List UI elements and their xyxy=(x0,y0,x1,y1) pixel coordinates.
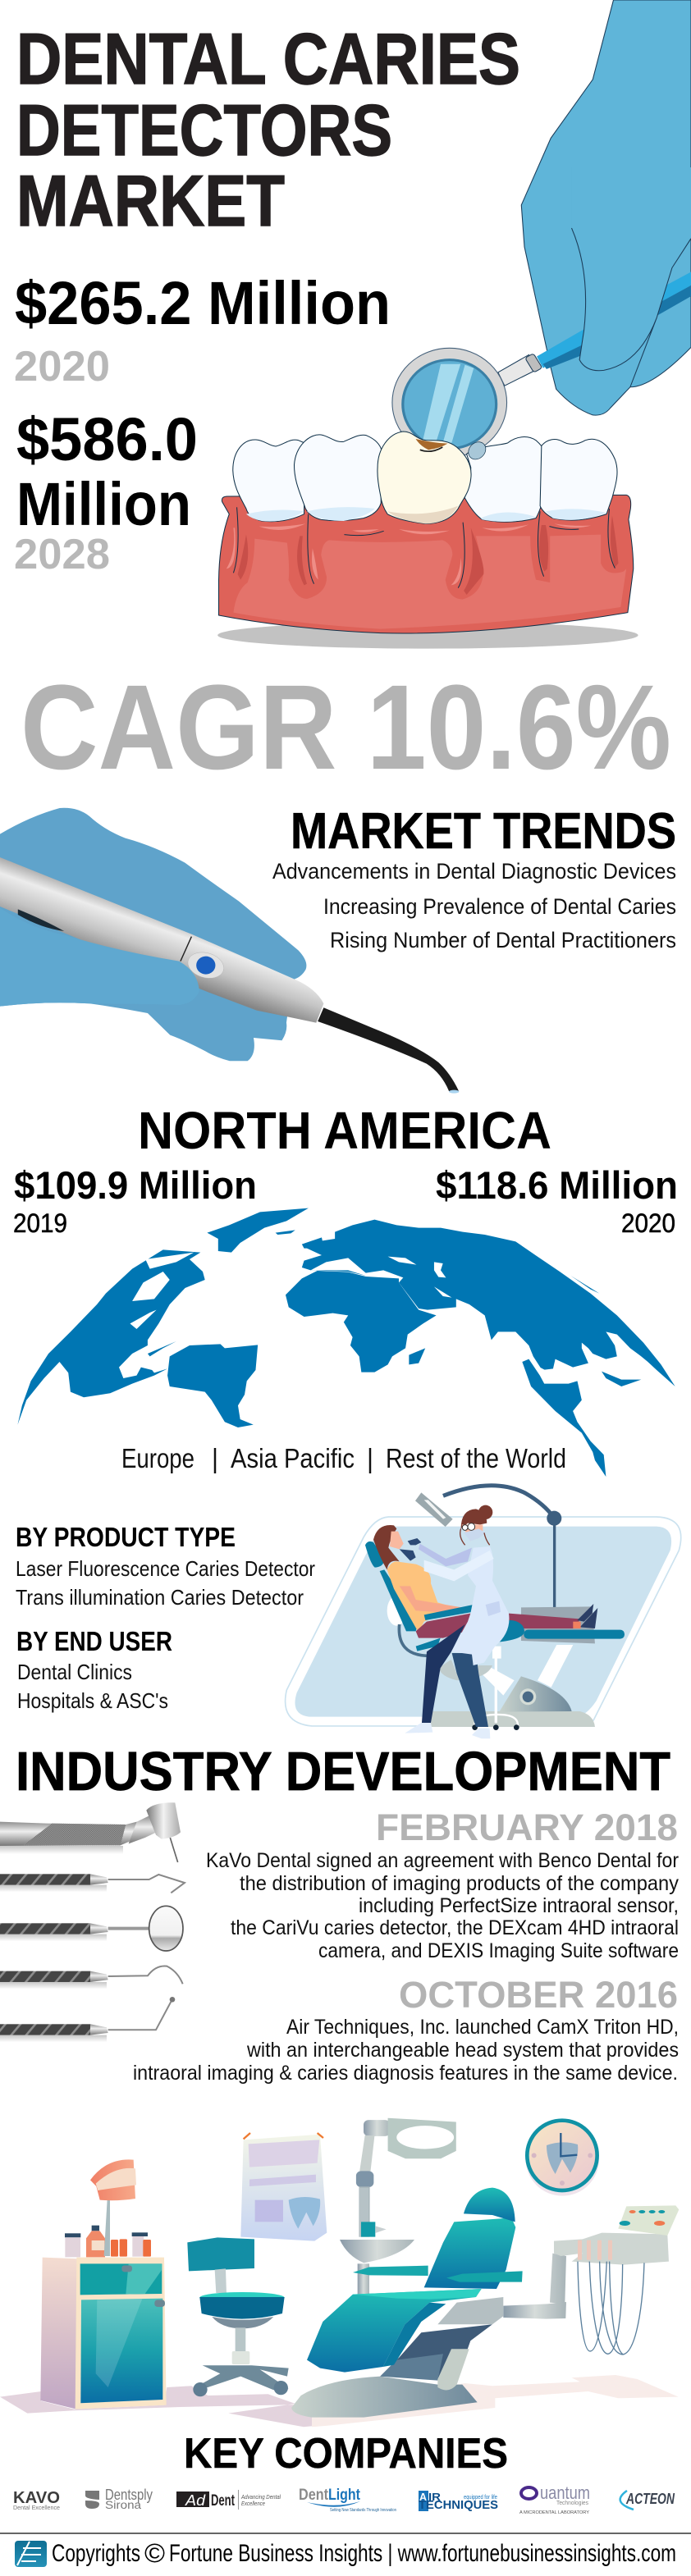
icon: gloved hand xyxy=(0,808,306,1061)
panel: February 2018 development xyxy=(206,1806,679,1962)
icon: patient xyxy=(365,1525,597,1656)
icon: delivery unit xyxy=(554,2205,679,2354)
text: other regions: Asia Pacific xyxy=(231,1443,355,1473)
stat: North America 2020: 2020 xyxy=(621,1208,675,1238)
logo: Air Techniques: TECHNIQUES xyxy=(419,2498,498,2512)
stat: 2020 market value: 2020 xyxy=(14,343,110,391)
stat: North America 2019: $109.9 Million xyxy=(14,1163,257,1207)
illustration: dental tools xyxy=(0,1802,185,2042)
icon: dental chair and delivery unit xyxy=(291,2188,679,2418)
heading: North America: NORTH AMERICA xyxy=(138,1101,551,1160)
text: copyright line: © xyxy=(144,2538,165,2568)
icon: gums xyxy=(219,495,634,633)
icon: explorer probe xyxy=(0,1874,185,1893)
icon: dentist xyxy=(400,1505,524,1738)
icon: gum highlights xyxy=(227,523,591,585)
logo: AdDent: Advancing Dental xyxy=(240,2493,281,2501)
logo: Quantum: Technologies xyxy=(556,2501,588,2506)
logo: KaVo: KAVO xyxy=(13,2489,60,2507)
icon: North America xyxy=(9,1249,205,1450)
icon: thumb xyxy=(0,908,199,1007)
icon: surgical light xyxy=(356,2118,456,2237)
logo: DentLight: Dent xyxy=(299,2487,329,2504)
heading: BY END USER xyxy=(16,1626,172,1656)
icon: background parallelogram xyxy=(286,1517,681,1726)
icon: chair backrest xyxy=(424,2217,515,2289)
text: other regions: | xyxy=(212,1443,218,1473)
logo: DentLight: Setting New Standards Through Innovation xyxy=(330,2508,396,2513)
title: MARKET xyxy=(16,160,285,241)
text block: end users: Dental Clinics xyxy=(17,1660,132,1684)
icon: white teeth xyxy=(233,435,617,522)
logo: Quantum xyxy=(519,2482,590,2515)
text block: end users xyxy=(17,1660,168,1713)
logo: Air Techniques xyxy=(419,2491,498,2512)
logo: AdDent xyxy=(176,2490,281,2510)
text: other regions xyxy=(121,1443,566,1473)
text block: product types: Laser Fluorescence Caries Detector xyxy=(16,1556,315,1581)
icon: Iceland xyxy=(276,1230,295,1235)
stat: 2020 market value: $265.2 Million xyxy=(15,269,391,337)
text: other regions: Europe xyxy=(121,1443,194,1473)
icon: glove xyxy=(521,0,691,415)
icon: stool xyxy=(187,2237,289,2396)
icon: cabinet xyxy=(40,2258,167,2409)
logo: Dentsply Sirona: Dentsply xyxy=(105,2487,153,2503)
logo: Dentsply Sirona: Sirona xyxy=(105,2498,141,2511)
logos: key companies xyxy=(13,2482,675,2515)
stat: 2028 market value xyxy=(14,405,198,578)
stat: 2020 market value xyxy=(14,269,391,391)
text block: product types xyxy=(16,1556,315,1610)
icon: gum light area xyxy=(233,535,626,629)
icon: Maritime Asia and Australia strip xyxy=(522,1359,606,1477)
icon: handpiece xyxy=(0,1802,181,1862)
logo: AdDent: Dent xyxy=(211,2492,235,2510)
icon: shadow under pen xyxy=(18,909,64,931)
panel: market trends xyxy=(272,803,676,952)
logo: Dentsply Sirona xyxy=(85,2487,153,2511)
icon: tooth root shading and cavity xyxy=(387,439,489,523)
stat: North America 2019 xyxy=(13,1163,257,1238)
logo: Fortune Business Insights xyxy=(15,2541,47,2567)
logo: AdDent: Ad xyxy=(185,2492,206,2509)
logo: AdDent: Excellence xyxy=(241,2500,265,2507)
icon: decayed tooth xyxy=(378,432,471,523)
icon: wall clock with tooth xyxy=(526,2121,599,2196)
icon: tooth bases xyxy=(246,507,606,522)
logo: Air Techniques: A xyxy=(419,2491,428,2503)
world map xyxy=(9,1208,675,1477)
icon: mouth mirror xyxy=(0,1906,183,1951)
stat: North America 2020: $118.6 Million xyxy=(436,1163,678,1207)
icon: dental chair base xyxy=(431,1606,625,1727)
icon: chair seat xyxy=(307,2289,482,2373)
illustration: gums and teeth xyxy=(217,432,638,649)
text block: trends xyxy=(272,859,676,952)
heading: OCTOBER 2016 xyxy=(399,1974,678,2016)
panel: October 2016 development xyxy=(133,1974,679,2085)
icon: mirror handle xyxy=(498,272,691,386)
icon: overhead lamp xyxy=(415,1486,561,1608)
icon: bottles and denture model xyxy=(65,2159,151,2257)
stat: 2028 market value: $586.0 xyxy=(16,405,198,473)
icon: UK xyxy=(302,1237,324,1249)
illustration: gloved hand holding caries detector pen xyxy=(0,808,459,1094)
panel: by product type xyxy=(16,1522,315,1610)
stat: 2028 market value: Million xyxy=(16,470,191,538)
stat: North America 2020 xyxy=(436,1163,678,1238)
icon: gum lines xyxy=(233,507,615,588)
illustration: dentist treating patient xyxy=(286,1486,681,1738)
footer: copyright xyxy=(15,2538,676,2568)
text block xyxy=(206,1849,679,1962)
icon: floor shadows xyxy=(0,2375,679,2427)
stat: North America 2019: 2019 xyxy=(13,1208,67,1238)
icon: Greenland xyxy=(207,1208,309,1253)
logo: Quantum: uantum xyxy=(540,2482,590,2503)
logo: Acteon xyxy=(620,2491,675,2510)
icon: chair pillar xyxy=(380,2324,492,2390)
footer divider xyxy=(0,2533,691,2534)
icon: glove finger xyxy=(571,167,691,371)
logo: Air Techniques: equipped for life xyxy=(464,2495,497,2501)
text block xyxy=(133,2016,679,2085)
text block: product types: Trans illumination Caries Detector xyxy=(16,1585,304,1610)
heading: BY PRODUCT TYPE xyxy=(16,1522,236,1552)
icon: sink xyxy=(340,2188,428,2295)
logo: Acteon: ACTEON xyxy=(625,2491,675,2507)
icon: headrest xyxy=(464,2188,515,2222)
icon: Caribbean islands xyxy=(148,1341,176,1356)
logo: KaVo: Dental Excellence xyxy=(13,2505,60,2511)
icon: armrest xyxy=(446,2271,523,2282)
logo: Air Techniques: IR xyxy=(428,2491,442,2503)
heading: key companies: KEY COMPANIES xyxy=(184,2430,508,2478)
icon: curved probe xyxy=(0,1966,183,1989)
title xyxy=(16,18,520,241)
icon: chair support xyxy=(503,2254,566,2319)
text block: trends: Rising Number of Dental Practitioners xyxy=(330,928,676,952)
icon: dental mirror xyxy=(392,348,507,457)
icon: South America xyxy=(167,1344,258,1427)
illustration: dental clinic room xyxy=(0,2118,679,2427)
icon: ball probe xyxy=(0,1997,175,2042)
icon: gum folds xyxy=(238,515,619,595)
icon: Eurasia xyxy=(302,1220,675,1386)
icon: floor shadow xyxy=(217,622,638,649)
logo: Quantum: A MICRODENTAL LABORATORY xyxy=(519,2510,589,2515)
text: other regions: Rest of the World xyxy=(386,1443,566,1473)
text: other regions: | xyxy=(367,1443,373,1473)
icon: detector pen xyxy=(0,857,459,1094)
icon: Japan and Pacific islands xyxy=(570,1276,641,1386)
icon: lakes and inland seas xyxy=(130,1253,575,1381)
panel: by end user xyxy=(16,1626,172,1713)
icon: Africa xyxy=(286,1271,437,1372)
illustration: gloved hand with mirror xyxy=(392,0,691,457)
title: DETECTORS xyxy=(16,89,392,171)
text block: end users: Hospitals & ASC's xyxy=(17,1688,168,1713)
stat: 2028 market value: 2028 xyxy=(14,531,110,578)
text: copyright line: Copyrights xyxy=(52,2540,140,2567)
heading: FEBRUARY 2018 xyxy=(376,1806,678,1848)
icon: chair base xyxy=(291,2377,478,2418)
text block: the distribution of imaging products of the company xyxy=(240,1872,679,1895)
icon: wall poster xyxy=(240,2133,327,2241)
logo: DentLight xyxy=(299,2487,396,2513)
title: DENTAL CARIES xyxy=(16,18,520,99)
icon: Madagascar xyxy=(409,1348,425,1364)
logo: DentLight: Light xyxy=(328,2487,361,2504)
